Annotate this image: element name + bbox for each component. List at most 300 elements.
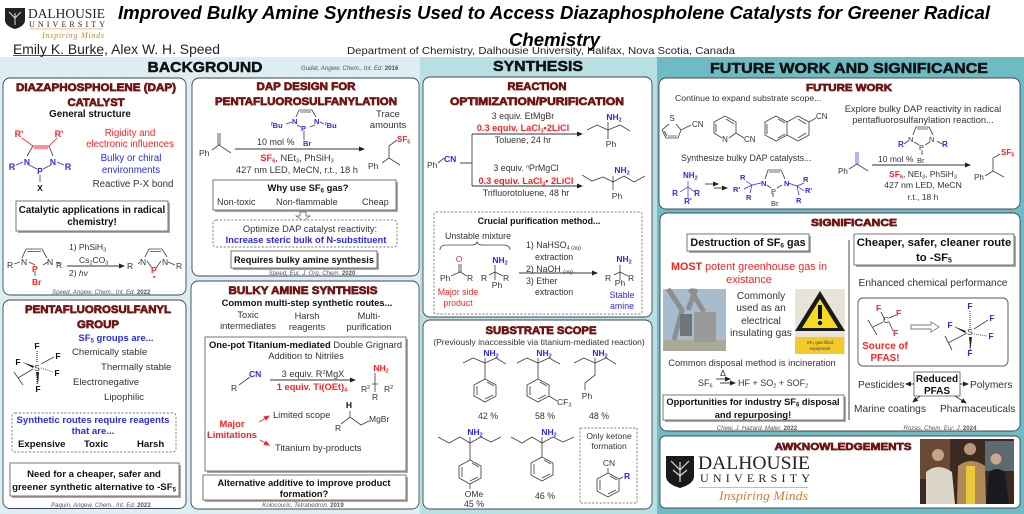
callout: opportunities: and repurposing! bbox=[715, 410, 791, 420]
product 1: Ph bbox=[606, 139, 616, 149]
reaction arrow and conditions: 427 nm LED, MeCN, r.t., 18 h bbox=[236, 165, 358, 175]
dashed callout: optimize: Increase steric bulk of N-substituent bbox=[226, 235, 386, 245]
heading: DIAZAPHOSPHOLENE (DAP) bbox=[16, 82, 176, 94]
heading: CATALYST bbox=[68, 97, 125, 109]
subheading: Common multi-step synthetic routes... bbox=[222, 297, 392, 308]
heading: FUTURE WORK bbox=[806, 82, 892, 94]
radical generation scheme: CO bbox=[92, 255, 106, 265]
callout: opportunities bbox=[663, 395, 846, 422]
explore text: Explore bulky DAP reactivity in radical bbox=[845, 104, 1001, 114]
DAP general structure: N bbox=[24, 157, 30, 167]
ketone and amine mixture: NH bbox=[492, 255, 505, 265]
compound 42%: 42 % bbox=[478, 411, 498, 421]
heading: synthesis: SYNTHESIS bbox=[493, 58, 583, 75]
major limitations: Major bbox=[219, 418, 245, 429]
trace amounts: Trace bbox=[376, 109, 400, 120]
incineration reaction: 6 bbox=[710, 384, 713, 390]
callout: need: Need for a cheaper, safer and bbox=[27, 469, 161, 480]
scheme: R bbox=[361, 384, 367, 394]
scheme: 2 bbox=[386, 368, 389, 374]
bulky DAP: R bbox=[740, 173, 746, 182]
citation: Kolocouris, Tetrahedron. 2019 bbox=[262, 502, 344, 509]
heading bbox=[450, 81, 624, 108]
reaction arrow and conditions: 3 bbox=[296, 158, 299, 164]
purification steps: 2) NaOH bbox=[526, 264, 561, 274]
hollow arrow bbox=[911, 322, 939, 332]
callout: destruction: Destruction of SF bbox=[690, 237, 780, 249]
bulky amine: R' bbox=[684, 197, 692, 206]
PFAS applications bbox=[854, 380, 1015, 415]
branching arrows bbox=[460, 134, 582, 186]
starting nitrile: Ph bbox=[427, 160, 438, 170]
styrene: Ph bbox=[199, 148, 210, 158]
catalyst: R bbox=[942, 140, 948, 149]
radical generation scheme: Br bbox=[32, 277, 42, 287]
product: Ph bbox=[974, 173, 984, 182]
incineration reaction: HF + SO bbox=[738, 378, 773, 388]
dashed box: purification: Crucial purification method... bbox=[478, 216, 600, 226]
conditions 2: PrMgCl bbox=[529, 163, 559, 173]
callout: need bbox=[10, 463, 181, 498]
major limitations bbox=[207, 410, 362, 453]
citation: Rozas, Chem. Eur. J. 2024 bbox=[904, 425, 977, 432]
box: one-pot method bbox=[205, 337, 408, 473]
incineration reaction bbox=[698, 368, 808, 390]
heading: OPTIMIZATION/PURIFICATION bbox=[450, 96, 624, 108]
catalyst structure: t bbox=[325, 122, 327, 128]
note: (Previously inaccessible via titanium-mediated reaction) bbox=[433, 337, 645, 347]
SF5 structure: F bbox=[55, 351, 61, 361]
header logo: DALHOUSIE bbox=[28, 6, 105, 21]
compound 58%: 2 bbox=[549, 354, 552, 360]
bulky DAP: R bbox=[746, 193, 752, 202]
stable amine: NH bbox=[616, 254, 629, 264]
route drawbacks: Harsh bbox=[295, 311, 319, 321]
heading: BULKY AMINE SYNTHESIS bbox=[228, 285, 378, 297]
heading: SUBSTRATE SCOPE bbox=[486, 325, 596, 337]
greenhouse claim: existance bbox=[726, 274, 772, 286]
conditions 1: 0.3 equiv. LaCl bbox=[477, 123, 540, 133]
bulky DAP bbox=[733, 170, 812, 208]
SF5 properties: Chemically stable bbox=[72, 347, 147, 358]
bulky DAP: R' bbox=[733, 185, 740, 194]
bulky DAP: Br bbox=[771, 199, 779, 208]
title: Improved Bulky Amine Synthesis Used to Access Diazaphospholene Catalysts for Greener Radical bbox=[118, 2, 991, 23]
panel: reaction optimization bbox=[423, 77, 652, 317]
product: 5 bbox=[407, 140, 410, 146]
scope text: Continue to expand substrate scope... bbox=[675, 93, 821, 103]
product 1 bbox=[587, 112, 630, 149]
catalyst: Br bbox=[917, 156, 925, 165]
purification steps: 1) NaHSO bbox=[526, 240, 567, 250]
insulating gas text: insulating gas bbox=[730, 328, 792, 339]
callout: catalytic applications: Catalytic applications in radical bbox=[19, 205, 165, 216]
properties: electronic influences bbox=[86, 139, 174, 150]
incineration reaction: + SOF bbox=[776, 378, 806, 388]
reaction arrow and conditions bbox=[235, 137, 364, 175]
purification steps: (aq) bbox=[570, 246, 581, 252]
method title bbox=[209, 339, 402, 361]
dashed box: ketone formation: Only ketone bbox=[586, 431, 632, 441]
dashed box: ketone formation: CN bbox=[603, 458, 615, 468]
catalyst structure: Br bbox=[303, 139, 311, 148]
starting nitrile: CN bbox=[444, 154, 456, 164]
callout: cheaper route bbox=[854, 234, 1016, 267]
citation: Gudat: Gudat, Angew. Chem., Int. Ed. 2016 bbox=[301, 65, 399, 72]
stable amine bbox=[605, 254, 635, 311]
scheme: 4 bbox=[344, 388, 348, 394]
dashed callout: synthetic routes: Harsh bbox=[137, 439, 164, 450]
reaction arrow: r.t., 18 h bbox=[908, 192, 939, 202]
callout: why SF6: Cheap bbox=[362, 197, 389, 207]
reaction arrow: SF bbox=[889, 169, 903, 180]
callout: destruction: 6 bbox=[780, 242, 784, 250]
radical generation scheme: N bbox=[140, 257, 146, 267]
panel: significance bbox=[660, 213, 1020, 432]
bulky amine: 2 bbox=[695, 176, 698, 182]
styrene: Ph bbox=[838, 167, 848, 176]
callout: why SF6: Non-toxic bbox=[217, 197, 256, 207]
reaction arrow: 3 bbox=[922, 174, 925, 180]
callout: alternative additive bbox=[203, 475, 408, 502]
bulky amine: R bbox=[694, 189, 700, 198]
reaction arrow: 3 bbox=[954, 174, 957, 180]
PFAS applications: Pharmaceuticals bbox=[940, 404, 1015, 415]
radical generation scheme: R bbox=[7, 260, 13, 270]
SF5 structure: S bbox=[34, 363, 40, 373]
compound 58%: NH bbox=[536, 348, 549, 358]
conditions 2: 0.3 equiv. LaCl bbox=[479, 176, 542, 186]
compound 42%: 2 bbox=[496, 354, 499, 360]
warning sign: equipment bbox=[809, 346, 831, 351]
title: Chemistry bbox=[509, 29, 602, 50]
DAP general structure: R bbox=[65, 162, 72, 172]
product: Ph bbox=[368, 161, 379, 171]
ketone and amine mixture: Ph bbox=[440, 273, 451, 283]
method title: Addition to Nitriles bbox=[268, 350, 344, 361]
purification steps: extraction bbox=[535, 252, 573, 262]
callout: opportunities: 6 bbox=[796, 402, 800, 408]
SF5 structure: F bbox=[35, 384, 41, 394]
CF3 group: F bbox=[896, 308, 901, 318]
reaction arrow: 427 nm LED, MeCN bbox=[884, 180, 962, 190]
Dalhousie logo bbox=[666, 453, 810, 503]
title bbox=[118, 2, 991, 50]
SF5 group: F bbox=[989, 313, 995, 323]
column: future work and significance bbox=[657, 57, 1024, 514]
route drawbacks: purification bbox=[347, 322, 391, 332]
major limitations: Limited scope bbox=[273, 410, 330, 420]
compound 45%: OMe bbox=[465, 489, 483, 499]
column: synthesis bbox=[420, 57, 657, 514]
SF5 structure: F bbox=[54, 368, 60, 378]
CF3 group: C bbox=[883, 315, 889, 325]
catalyst: N bbox=[929, 135, 934, 144]
callout: opportunities: Opportunities for industry SF bbox=[666, 397, 796, 407]
catalyst structure: P bbox=[301, 124, 306, 133]
route drawbacks: Multi- bbox=[358, 311, 380, 321]
SF5 group: F bbox=[967, 348, 973, 358]
panel: DAP design bbox=[192, 78, 419, 277]
SF5 properties: Electronegative bbox=[73, 377, 139, 388]
naphthalene: CN bbox=[816, 112, 828, 121]
scheme: MgX bbox=[325, 369, 344, 379]
bulky DAP: R bbox=[796, 196, 802, 205]
SF5 structure: F bbox=[15, 357, 21, 367]
ketone and amine mixture: R bbox=[467, 273, 473, 283]
reaction arrow: 10 mol % bbox=[878, 154, 914, 164]
conditions 1: •2LiCl bbox=[544, 123, 569, 133]
reaction arrow and conditions: 6 bbox=[272, 158, 275, 164]
dashed callout: synthetic routes: Expensive bbox=[18, 439, 65, 450]
catalyst structure: N bbox=[292, 117, 297, 126]
scheme: 2 bbox=[390, 385, 393, 391]
reaction arrow and conditions: , NEt bbox=[275, 153, 296, 163]
purification steps: 4 bbox=[567, 246, 570, 252]
radical generation scheme: Cs bbox=[79, 255, 89, 265]
product 1: 2 bbox=[619, 118, 622, 124]
radical generation scheme: P bbox=[151, 265, 157, 275]
callout: need: greener synthetic alternative to -SF bbox=[12, 482, 173, 493]
explore text: pentafluorosulfanylation reaction... bbox=[852, 115, 994, 125]
reduced PFAS box: PFAS bbox=[924, 386, 950, 397]
compound 58%: 3 bbox=[568, 402, 571, 408]
header logo: UNIVERSITY bbox=[29, 20, 105, 29]
purification steps bbox=[519, 240, 597, 297]
incineration reaction: 2 bbox=[773, 384, 776, 390]
method title: One-pot Titanium-mediated Double Grignard bbox=[209, 339, 402, 350]
catalyst structure: t bbox=[271, 122, 273, 128]
ketone and amine mixture: R bbox=[503, 273, 509, 283]
DAP general structure: R bbox=[9, 162, 16, 172]
radical generation scheme: R bbox=[176, 261, 182, 271]
header logo: Inspiring Minds bbox=[41, 31, 104, 40]
greenhouse claim bbox=[671, 261, 827, 286]
explore text bbox=[845, 104, 1001, 125]
product 2: Ph bbox=[612, 191, 622, 201]
heading bbox=[25, 304, 171, 331]
DAP general structure: N bbox=[50, 157, 56, 167]
scheme: CN bbox=[249, 369, 261, 379]
reaction arrow and conditions: , PhSiH bbox=[299, 153, 331, 163]
bulky DAP: R bbox=[803, 175, 809, 184]
insulating gas text: electrical bbox=[741, 316, 781, 327]
callout: need: 5 bbox=[173, 488, 177, 494]
callout: opportunities: disposal bbox=[799, 397, 840, 407]
compound 46% bbox=[511, 427, 574, 501]
panel: bulky amine synthesis bbox=[191, 281, 419, 509]
route drawbacks bbox=[220, 310, 391, 332]
dashed box: purification: Unstable mixture bbox=[445, 231, 511, 241]
callout: requires bbox=[231, 251, 379, 270]
conditions 1: 3 bbox=[540, 128, 544, 134]
grignard structure: MgBr bbox=[369, 414, 389, 424]
reaction arrow and conditions: SF bbox=[260, 153, 275, 164]
grignard structure: H bbox=[346, 400, 352, 410]
conditions 1: Toluene, 24 hr bbox=[495, 135, 551, 145]
compound 46%: 46 % bbox=[535, 491, 555, 501]
catalyst bbox=[898, 127, 948, 165]
scheme: R bbox=[231, 383, 237, 393]
pyridine: CN bbox=[744, 135, 756, 144]
insulating gas text: Commonly bbox=[737, 291, 786, 302]
citation: Speed, Eur. J. Org. Chem. 2020 bbox=[269, 270, 356, 277]
catalyst structure: Bu bbox=[327, 121, 337, 130]
compound 42%: NH bbox=[483, 348, 496, 358]
stable amine: Stable bbox=[610, 290, 635, 300]
heading bbox=[215, 81, 397, 108]
scheme: 1 equiv. Ti(OEt) bbox=[277, 382, 344, 392]
heading: REACTION bbox=[508, 81, 567, 93]
compound 48%: 2 bbox=[605, 354, 608, 360]
reaction arrow bbox=[872, 154, 970, 202]
header logo bbox=[5, 6, 105, 40]
dashed callout: optimize bbox=[213, 220, 397, 247]
radical generation scheme: 2 bbox=[89, 260, 92, 266]
insulating gas text: used as an bbox=[736, 303, 786, 314]
subheading: General structure bbox=[49, 109, 131, 120]
properties bbox=[86, 128, 174, 190]
grignard structure bbox=[335, 400, 389, 433]
box: PFAS comparison bbox=[858, 298, 1008, 366]
greenhouse claim: MOST potent greenhouse gas in bbox=[671, 261, 827, 273]
dashed callout: optimize: Optimize DAP catalyst reactivity: bbox=[243, 224, 377, 234]
compound 48%: Ph bbox=[582, 391, 592, 401]
callout: destruction bbox=[687, 234, 811, 253]
thiophene: CN bbox=[692, 120, 704, 129]
radical generation scheme: 2) hv bbox=[69, 268, 89, 278]
scheme: NH bbox=[373, 363, 386, 373]
trace amounts: amounts bbox=[370, 120, 406, 131]
panel: substrate scope bbox=[423, 320, 652, 509]
SF5 structure: F bbox=[34, 341, 40, 351]
affiliation: Department of Chemistry, Dalhousie University, Halifax, Nova Scotia, Canada bbox=[347, 45, 735, 57]
properties: Bulky or chiral bbox=[101, 153, 161, 164]
stable amine: Ph bbox=[615, 278, 625, 288]
compound 45%: NH bbox=[467, 427, 480, 437]
SF5 group: F bbox=[988, 331, 994, 341]
compound 42% bbox=[463, 348, 506, 421]
CF3 group: F bbox=[893, 328, 898, 338]
catalyst structure bbox=[271, 110, 337, 148]
conditions 2: Trifluorotoluene, 48 hr bbox=[483, 188, 569, 198]
conditions 2: 3 equiv. bbox=[493, 163, 524, 173]
SF5 structure bbox=[14, 341, 61, 394]
major limitations: Limitations bbox=[207, 429, 257, 440]
compound 48%: NH bbox=[592, 348, 605, 358]
scheme: R bbox=[372, 392, 378, 402]
ketone and amine mixture: 2 bbox=[505, 260, 508, 266]
styrene bbox=[199, 133, 231, 158]
conditions 2 bbox=[479, 163, 573, 198]
product 2: 2 bbox=[627, 170, 630, 176]
ketone and amine mixture bbox=[438, 254, 509, 308]
compound 46%: NH bbox=[541, 427, 554, 437]
pyridine bbox=[714, 116, 756, 144]
enhanced performance: Enhanced chemical performance bbox=[859, 278, 1008, 289]
bulky DAP: N bbox=[784, 179, 789, 188]
heading: background: BACKGROUND bbox=[148, 59, 263, 76]
panel: future work bbox=[659, 78, 1020, 209]
major limitations: Titanium by-products bbox=[275, 443, 362, 453]
route drawbacks: Toxic bbox=[237, 310, 259, 320]
Dalhousie logo: Inspiring Minds bbox=[718, 488, 808, 503]
incineration reaction: SF bbox=[698, 378, 710, 388]
Dalhousie logo: UNIVERSITY bbox=[700, 471, 810, 485]
compound 45%: 2 bbox=[480, 432, 483, 438]
radical generation scheme: P bbox=[32, 264, 38, 274]
radical generation scheme: 3 bbox=[105, 260, 108, 266]
PFAS applications: Pesticides bbox=[858, 380, 904, 391]
reaction arrow: , PhSiH bbox=[925, 169, 954, 179]
radical generation scheme: N bbox=[21, 257, 27, 267]
warning sign bbox=[795, 289, 845, 354]
naphthalene bbox=[765, 112, 828, 141]
properties: Reactive P-X bond bbox=[93, 179, 173, 190]
authors: Emily K. Burke, Alex W. H. Speed bbox=[13, 42, 220, 57]
stable amine: R bbox=[628, 273, 634, 283]
synthesize text: Synthesize bulky DAP catalysts... bbox=[681, 153, 811, 163]
panel: pentafluorosulfanyl group bbox=[3, 300, 186, 509]
Dalhousie logo: DALHOUSIE bbox=[698, 453, 810, 474]
panel: acknowledgements bbox=[660, 436, 1020, 508]
product: SF bbox=[1001, 148, 1011, 157]
dashed callout: synthetic routes bbox=[12, 413, 176, 452]
SF5 properties: Lipophilic bbox=[104, 392, 144, 403]
insulating gas text bbox=[730, 291, 792, 339]
product: SF bbox=[397, 135, 407, 144]
SF5 group: S bbox=[967, 327, 973, 337]
thiophene: S bbox=[669, 114, 675, 123]
SF5 group: F bbox=[967, 301, 973, 311]
PFAS applications: Marine coatings bbox=[854, 404, 926, 415]
purification steps: (aq) bbox=[563, 270, 573, 276]
radical generation scheme: 3 bbox=[103, 248, 106, 254]
SF5 subheading: SF bbox=[78, 333, 91, 344]
radical generation scheme: N bbox=[162, 257, 168, 267]
compound 45% bbox=[438, 427, 501, 509]
SF5 properties: Thermally stable bbox=[101, 362, 171, 373]
callout: why SF6: Why use SF bbox=[268, 182, 321, 193]
bulky amine bbox=[672, 171, 700, 206]
heading: AWKNOWLEDGEMENTS bbox=[774, 441, 912, 453]
column: background bbox=[0, 57, 420, 514]
starting nitrile bbox=[427, 154, 456, 170]
scheme: R bbox=[384, 384, 390, 394]
callout: catalytic applications: chemistry! bbox=[67, 217, 117, 228]
heading: SIGNIFICANCE bbox=[811, 217, 897, 229]
dashed callout: synthetic routes: Synthetic routes require reagents bbox=[16, 415, 170, 426]
DAP general structure: R' bbox=[15, 129, 23, 139]
product 1: NH bbox=[606, 112, 619, 122]
ketone and amine mixture: Major side bbox=[438, 287, 478, 297]
scheme: 3 equiv. R bbox=[282, 369, 322, 379]
properties: environments bbox=[102, 165, 160, 176]
conditions 1: 3 equiv. EtMgBr bbox=[492, 111, 554, 121]
callout: why SF6: Non-flammable bbox=[276, 197, 338, 207]
product 2 bbox=[582, 165, 645, 201]
disposal text: Common disposal method is incineration bbox=[668, 358, 836, 368]
compound 48% bbox=[574, 348, 616, 421]
callout: why SF6 bbox=[213, 180, 398, 212]
heading: DAP DESIGN FOR bbox=[256, 81, 356, 93]
citation: Speed, Angew. Chem., Int. Ed. 2022 bbox=[52, 289, 151, 296]
ketone and amine mixture: Ph bbox=[492, 280, 502, 290]
ketone and amine mixture: O bbox=[456, 254, 463, 264]
properties: Rigidity and bbox=[105, 128, 155, 139]
compound 45%: 45 % bbox=[464, 499, 484, 509]
DAP general structure: R' bbox=[55, 129, 63, 139]
